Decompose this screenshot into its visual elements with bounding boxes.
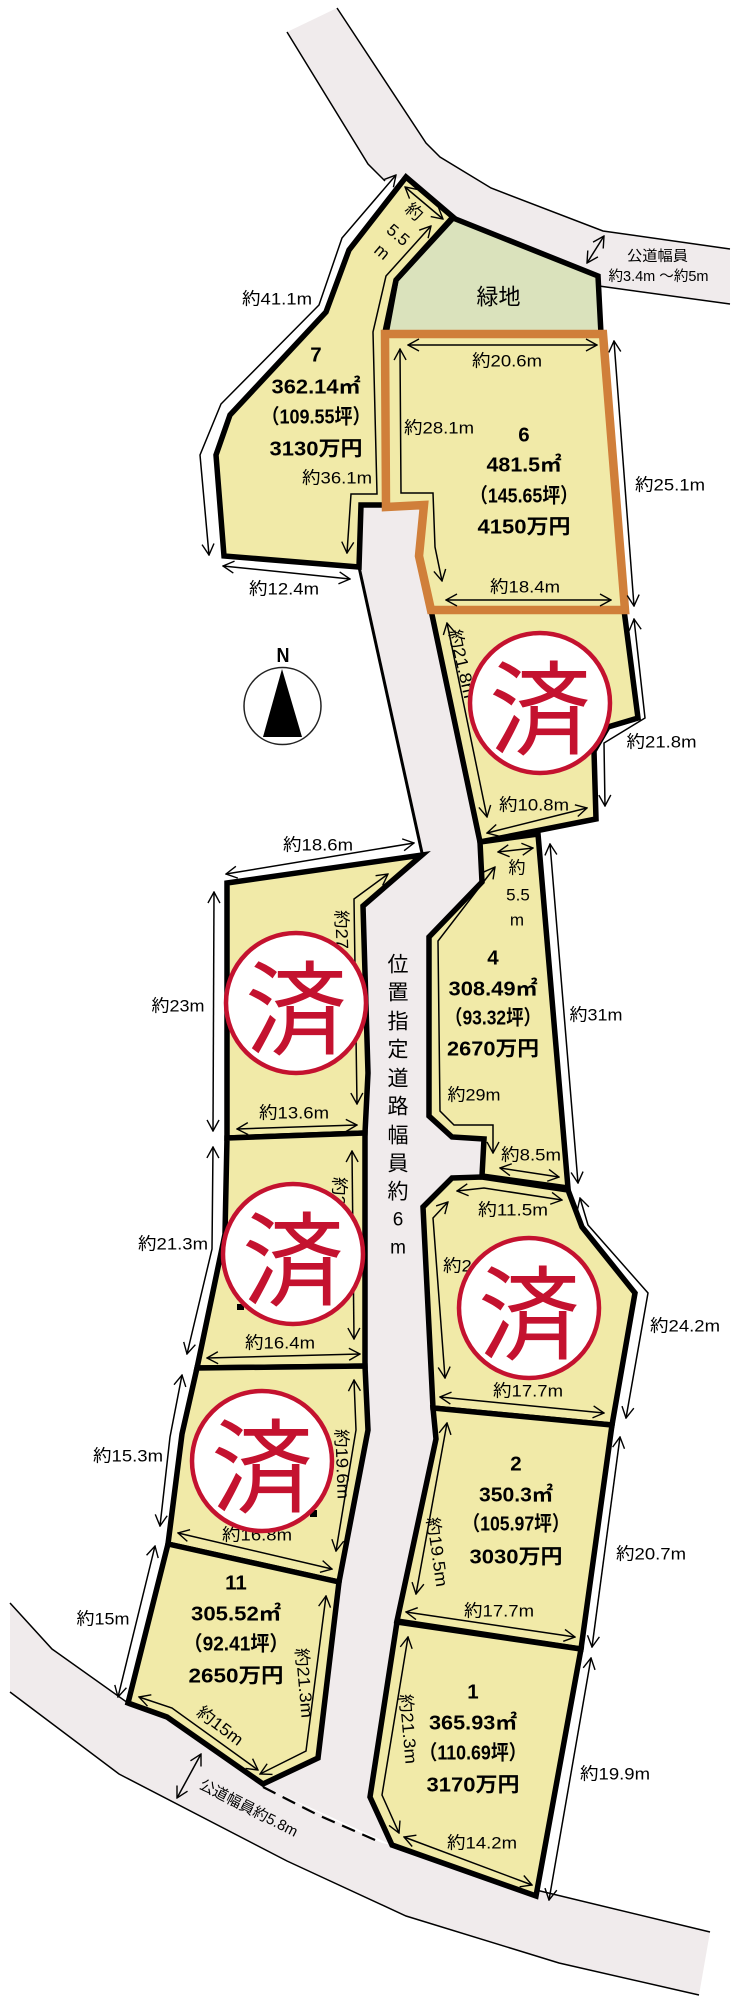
lot 2 dimensions: 約20.7m xyxy=(616,1544,686,1564)
road label vertical: 幅 xyxy=(388,1124,408,1148)
lot 11 info: 11 xyxy=(225,1572,247,1594)
lot 6 dimensions: 約25.1m xyxy=(635,476,705,494)
lot 10 sold xyxy=(152,836,422,1138)
lot 2 dimensions: 約17.7m xyxy=(464,1602,534,1620)
lot 1 dimensions: 約19.9m xyxy=(580,1764,650,1784)
lot 9 dimensions: 約16.4m xyxy=(245,1334,315,1352)
lot 7 dimensions: 約41.1m xyxy=(242,290,312,308)
lot 4 xyxy=(429,834,622,1188)
lot 5 dimensions: 約21.8m xyxy=(445,628,479,700)
lot 10 dimensions: 約18.6m xyxy=(283,836,353,854)
lot 10 dimensions xyxy=(152,836,414,1131)
lot 11 info: （92.41坪） xyxy=(184,1632,288,1656)
lot 7 info: （109.55坪） xyxy=(262,406,370,428)
lot 7 dimensions: 5.5 xyxy=(383,220,413,250)
compass north xyxy=(244,645,321,744)
road width arrow top xyxy=(587,236,604,263)
lot 10 dimensions: 約13.6m xyxy=(259,1104,329,1122)
sold stamp lot 3: 済 xyxy=(478,1234,580,1382)
lot 2 xyxy=(397,1408,686,1649)
bottom public road xyxy=(10,1603,710,1995)
lot 7 xyxy=(200,175,453,598)
lot 9 dimensions xyxy=(138,1147,360,1358)
lot 4 dimensions: 約31m xyxy=(570,1006,622,1024)
lot 6 dimensions xyxy=(400,341,705,606)
lot 11 info xyxy=(184,1572,288,1688)
lot 6 highlighted xyxy=(385,334,705,610)
lot 11 dimensions xyxy=(76,1546,326,1774)
lot 6 info: 481.5㎡ xyxy=(486,454,562,476)
lot 2 info: 350.3㎡ xyxy=(479,1484,554,1506)
road label vertical: m xyxy=(390,1238,406,1258)
lot 11 xyxy=(76,1544,339,1784)
lot 2 info xyxy=(462,1452,570,1568)
lot 11 dimensions: 約21.3m xyxy=(291,1647,317,1719)
lot 1 info: 3170万円 xyxy=(426,1774,520,1796)
lot 11 dimensions: 約15m xyxy=(193,1702,247,1750)
lot 4 dimensions: 約8.5m xyxy=(501,1146,561,1164)
lot 7 info: 3130万円 xyxy=(270,438,362,460)
lot 5 dimensions: 約21.8m xyxy=(626,732,696,752)
road edge line xyxy=(359,567,422,853)
green area label: 緑地 xyxy=(476,284,521,310)
lot 4 dimensions: 5.5 xyxy=(506,886,530,904)
lot 4 dimensions: 約 xyxy=(508,858,526,878)
lot 4 info: 308.49㎡ xyxy=(448,978,538,1000)
lot 8 dimensions xyxy=(93,1375,356,1569)
lot 6 info: （145.65坪） xyxy=(470,484,578,508)
road width label top: 約3.4m ～約5m xyxy=(608,268,708,285)
sold stamp lot 10: 済 xyxy=(245,930,347,1076)
lot 8 dimensions: 約15.3m xyxy=(93,1446,163,1466)
road label vertical: 置 xyxy=(388,982,408,1004)
green area xyxy=(386,218,601,334)
lot 9 sold xyxy=(138,1133,365,1368)
lot 10 dimensions: 約27.9m xyxy=(331,910,353,980)
lot 6 info xyxy=(470,424,578,538)
sold stamp lot 5: 済 xyxy=(489,630,591,776)
lot 1 info: （110.69坪） xyxy=(420,1742,526,1764)
lot 6 dimensions: 約28.1m xyxy=(404,418,474,438)
lot 3 sold xyxy=(423,1177,720,1425)
lot 1 xyxy=(370,1622,650,1900)
sold stamp lot 8: 済 xyxy=(211,1388,313,1534)
road label vertical: 位 xyxy=(388,954,408,976)
lot 3 dimensions: 約11.5m xyxy=(478,1200,548,1220)
lot 7 dimensions: 約12.4m xyxy=(249,580,319,598)
road width label top: 公道幅員 xyxy=(627,248,688,265)
lot 5 dimensions: 約10.8m xyxy=(499,796,569,814)
lot 11 info: 2650万円 xyxy=(188,1664,284,1688)
lot 2 dimensions xyxy=(406,1423,686,1647)
lot 3 dimensions: 約17.7m xyxy=(493,1382,563,1400)
compass north: N xyxy=(276,645,290,667)
lot 2 info: 3030万円 xyxy=(470,1546,562,1568)
lot 1 dimensions: 約14.2m xyxy=(447,1834,517,1852)
sold stamp lot 9: 済 xyxy=(242,1180,344,1328)
lot 2 info: （105.97坪） xyxy=(462,1512,570,1536)
road label vertical: 員 xyxy=(388,1152,408,1176)
lot 1 dimensions: 約21.3m xyxy=(395,1693,421,1765)
lot 7 dimensions xyxy=(200,175,443,598)
lot 4 info xyxy=(445,946,541,1060)
road label vertical: 約 xyxy=(388,1180,408,1204)
lot 7 dimensions: m xyxy=(370,240,394,264)
lot 6 dimensions: 約20.6m xyxy=(472,352,542,370)
central designated road xyxy=(263,505,483,1845)
lot 4 dimensions xyxy=(438,844,622,1183)
lot 5 sold xyxy=(431,610,696,842)
lot 8 dimensions: 約19.6m xyxy=(331,1429,353,1499)
lot 6 info: 4150万円 xyxy=(478,516,570,538)
lot 1 info: 365.93㎡ xyxy=(429,1712,518,1734)
lot 7 info: 7 xyxy=(310,344,322,366)
lot 7 info: 362.14㎡ xyxy=(272,376,361,398)
lot 3 dimensions: 約21.0m xyxy=(443,1256,513,1276)
dashed road boundary xyxy=(263,1787,382,1843)
lot 9 dimensions: 約21.3m xyxy=(330,1177,348,1247)
lot 4 info: （93.32坪） xyxy=(445,1006,541,1030)
lot 2 dimensions: 約19.5m xyxy=(423,1516,451,1588)
lot 4 dimensions: 約29m xyxy=(448,1086,500,1104)
road label vertical: 定 xyxy=(388,1038,408,1062)
lot 11 dimensions: 約15m xyxy=(76,1610,130,1628)
lot 4 dimensions: m xyxy=(510,910,524,930)
lot 3 dimensions xyxy=(433,1188,720,1418)
lot 4 info: 2670万円 xyxy=(447,1038,539,1060)
lot 6 info: 6 xyxy=(518,424,530,446)
lot 1 dimensions xyxy=(382,1637,650,1900)
lot 7 dimensions: 約36.1m xyxy=(302,468,372,488)
road width label bottom: 公道幅員約5.8m xyxy=(197,1776,300,1841)
lot 8 sold xyxy=(93,1366,368,1582)
lot 11 info: 305.52㎡ xyxy=(191,1602,282,1626)
lot 9 dimensions: 約21.3m xyxy=(138,1234,208,1254)
lot 6 dimensions: 約18.4m xyxy=(490,578,560,596)
lot 4 info: 4 xyxy=(487,946,499,970)
lot 3 dimensions: 約24.2m xyxy=(650,1316,720,1336)
road label vertical: 道 xyxy=(388,1068,408,1090)
road width arrow bottom xyxy=(177,1754,201,1798)
lot 10 dimensions: 約23m xyxy=(152,996,204,1016)
lot 7 dimensions: 約 xyxy=(401,199,427,225)
lot 2 info: 2 xyxy=(510,1452,522,1476)
top public road xyxy=(287,8,730,304)
lot 5 dimensions xyxy=(445,619,696,833)
road label vertical: 指 xyxy=(388,1010,408,1034)
road label vertical: 路 xyxy=(388,1096,408,1118)
lot 7 info xyxy=(262,344,370,460)
road width label top xyxy=(608,248,708,285)
road label vertical: 6 xyxy=(393,1210,403,1230)
road label vertical xyxy=(388,954,408,1258)
lot 1 info xyxy=(420,1680,526,1796)
lot 8 dimensions: 約16.8m xyxy=(222,1526,292,1544)
lot 1 info: 1 xyxy=(467,1680,479,1704)
